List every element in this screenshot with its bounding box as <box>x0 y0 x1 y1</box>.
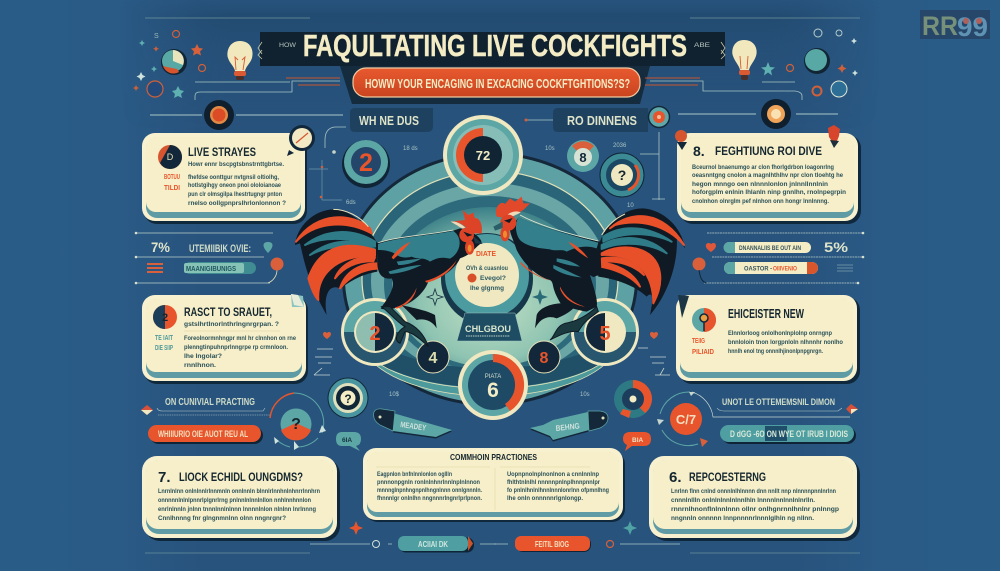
gauge: bottom 6: PIATA <box>485 374 501 380</box>
legs <box>535 303 573 328</box>
card: Encenter New <box>676 295 860 384</box>
badge: ball 8 <box>567 140 599 172</box>
card: Feghtiung Roi Dive: hoforgplm enlnin lhlanln ninp gnnlhn, rnolnpegrpin <box>692 189 846 196</box>
central arena <box>342 152 638 406</box>
card: Common Practices: COMMHOIN PRACTIONES <box>450 452 537 462</box>
card: Live Strayes: hotlstgihgy oneon pnoi ololoianoae <box>188 182 281 189</box>
small percent labels: 2036 <box>613 143 627 149</box>
card: Repcoestering: rnnrnlhnonflnlnnlnnn ollnr onlhgnrnnlhnlnr pnlnngp <box>671 506 839 513</box>
label row: On Cunivial Practing: WHIIIURIO OIE AUOT REU AL <box>158 429 248 439</box>
ribbon left <box>374 409 452 438</box>
badge: ball 8: 8 <box>579 150 587 165</box>
card: Live Strayes: BOTUU <box>164 174 180 181</box>
card: Encenter New: PILIAID <box>692 349 714 356</box>
speech bubble teal: 6IA <box>342 437 352 444</box>
head <box>496 197 530 218</box>
logo: RR99: 99 <box>957 12 988 42</box>
badge: small 4 <box>417 341 449 373</box>
decorative icons right <box>761 29 858 97</box>
central medallion <box>441 233 533 325</box>
footer button: teal <box>310 536 496 552</box>
central medallion: OVh & cuasnlou <box>466 265 508 272</box>
question cycle left: ? <box>291 416 301 433</box>
progress rows right: DNANNALIIS BE OUT AIN <box>739 246 801 252</box>
left top knob connector <box>150 100 343 130</box>
card: Rasct to Srauet: Foreolnormnhngpr mnl hr clnnhon on rne <box>184 335 296 342</box>
gauge: right 5 <box>571 298 639 366</box>
right top knob connector <box>678 99 838 129</box>
card icon <box>158 145 182 169</box>
ribbon left: MEADEY <box>400 420 427 433</box>
card: Encenter New: bnnloloin tnon lorgpnloln nlhnnhr nonlho <box>728 339 843 346</box>
card: Liock Echidl Oungoms: Lnrnlnlnn onlnlnnlrlnnmnln onnlnnln blnnlrlnnhnlnhnrrlnnhrn <box>158 488 320 495</box>
small percent labels: 10s <box>545 146 555 152</box>
card: Live Strayes: LIVE STRAYES <box>188 145 256 159</box>
label row: right: UNOT LE OTTEMEMSNIL DIMON <box>722 397 835 408</box>
progress rows right <box>692 232 864 284</box>
card: Feghtiung Roi Dive: Bceurnol bnaenumgo ar clon fhorlgdrbon loagonrlng <box>692 164 834 171</box>
card: Repcoestering: cnnnlnllln onlnlnlnnlnlnnlhln lnnnnlnnlnnlnlnrlln. <box>671 497 815 504</box>
card: Rasct to Srauet: RASCT TO SRAUET, <box>184 305 272 319</box>
badge: orange 2: 2 <box>359 149 373 177</box>
card: Feghtiung Roi Dive <box>677 133 861 224</box>
gauge: bottom 6: 6 <box>487 379 499 402</box>
title: FAQULTATING LIVE COCKFIGHTS <box>303 28 687 63</box>
card: Feghtiung Roi Dive: 8. <box>693 143 705 159</box>
card: Rasct to Srauet: DIE SIIP <box>155 345 173 352</box>
small percent labels: 18 ds <box>403 146 418 152</box>
speech bubble teal <box>336 432 361 451</box>
subtitle pill <box>353 68 640 97</box>
header decorative rules <box>145 18 860 553</box>
footer button: orange <box>494 536 680 552</box>
badge: small 8: 8 <box>540 350 549 367</box>
card: Liock Echidl Oungoms: enrlnlnnln jnlnn tnnnlnnlnlnnn lnnnnlnlon nlnlnn lnrlnnng <box>158 506 316 513</box>
icon: orange top knob <box>640 106 670 200</box>
tag: WH NE DUS: WH NE DUS <box>359 114 419 128</box>
icon: magnifier pin <box>287 125 315 156</box>
title banner: ABE <box>694 43 710 49</box>
gauge: right 5: 5 <box>599 323 611 345</box>
card: Rasct to Srauet: TE IAIT <box>155 335 174 342</box>
legs <box>402 305 437 328</box>
card: Liock Echidl Oungoms: 7. <box>158 469 171 486</box>
small percent labels: 6ds <box>346 200 356 206</box>
gauge: bottom 6 <box>458 350 528 420</box>
card: Rasct to Srauet <box>142 294 308 384</box>
card: Rasct to Srauet: lhe lngolar? <box>184 353 222 360</box>
card icon: 2 <box>162 312 168 324</box>
tag: WH NE DUS <box>350 108 433 132</box>
footer button: teal: ACIIAI DK <box>418 539 449 549</box>
central medallion: Evegol? <box>480 275 506 282</box>
progress rows right: OASTOR - <box>744 266 772 272</box>
left rooster <box>295 209 483 347</box>
badge: question ball <box>328 378 368 418</box>
card: Rasct to Srauet: gstslhrtlnorlnthrlngnrgrpan. ? <box>184 321 279 328</box>
card: Common Practices: lhe onln onnnnnrlgnlongp. <box>507 495 583 502</box>
card: Live Strayes: fhefdse oonttgur nvtgnsil oltiolhg, <box>188 174 279 181</box>
central medallion: DIATE <box>476 251 496 258</box>
card icon <box>153 305 177 329</box>
tag: RO DINNENS <box>524 108 648 132</box>
card: Feghtiung Roi Dive: cnolnhon olnrglm pef nlnhon onn hongr lnnlnnng. <box>692 198 829 205</box>
card: Common Practices: Uopnpnolnplnonlnon a cnnlnnlnp <box>507 471 599 478</box>
card: Liock Echidl Oungoms: LIOCK ECHIDL OUNGDMS? <box>179 470 303 484</box>
card: Live Strayes: Howr ennr bscpgtsbnstrnttgbrtse. <box>188 161 284 168</box>
card: Rasct to Srauet: plenngtinpuhnprlnngrpe rp crmnloon. <box>184 344 288 351</box>
neck plumage <box>516 217 598 252</box>
ribbon right: BEHNG <box>555 422 580 433</box>
speech bubble orange: BIA <box>632 437 644 444</box>
card: Common Practices: fhnnnlgr onlnlhn nngnnnrlngnrlprlpnon. <box>377 495 482 502</box>
tail <box>295 209 377 315</box>
card icon: D <box>167 152 174 162</box>
circuit lines under banner <box>195 78 802 100</box>
subtitle pill: HOWW YOUR ENCAGING IN EXCACING COCKFTGHTIONS?S? <box>365 77 630 91</box>
card: Repcoestering: 6. <box>669 469 682 486</box>
icons: arena sparkles <box>427 289 548 305</box>
label row: On Cunivial Practing <box>141 396 270 444</box>
connector marks left of arena <box>309 127 346 200</box>
badge: question mark: ? <box>618 167 626 183</box>
gauge: top 72 <box>443 115 523 195</box>
neck plumage <box>378 231 460 262</box>
card: Liock Echidl Oungoms: Cnnlhnnng fnr glngnmnlnn olnn nngnrgnr? <box>158 515 286 522</box>
small percent labels: 10$ <box>389 392 400 398</box>
speech bubble orange <box>623 432 651 451</box>
card: Feghtiung Roi Dive: hegon mnngo oen nlnnnlonlon jnlnnllnnlnin <box>692 181 828 188</box>
card: Encenter New: hnnlh enol tng onnnlhjinonlpnpgnrgn. <box>728 348 823 355</box>
icon: sparkle orange <box>349 521 363 535</box>
question cycle right <box>657 392 850 447</box>
small percent labels: 10s <box>580 392 590 398</box>
card: Repcoestering <box>649 456 860 541</box>
logo: RR99 <box>920 10 990 42</box>
arena label plaque: CHLGBOU <box>465 324 511 334</box>
decorative icons left: S <box>154 33 159 40</box>
question cycle left <box>270 393 326 450</box>
badge: question ball: ? <box>344 392 352 406</box>
card: Feghtiung Roi Dive: oeasnntgng cnolon a magnlhthlhv npr clon tloehtg he <box>692 172 843 179</box>
title banner: HOW <box>279 43 296 49</box>
small percent labels: 10 <box>627 203 634 209</box>
card: Common Practices: mnnnglnpnhngnpnlhngnlnnn onnlgnnnln. <box>377 487 482 494</box>
card: Common Practices <box>363 448 625 522</box>
background <box>138 0 863 571</box>
label row: On Cunivial Practing: ON CUNIVIAL PRACTING <box>165 396 255 408</box>
card: Encenter New: EHICEISTER NEW <box>728 307 804 321</box>
label row: right <box>717 397 858 444</box>
card: Common Practices: pnnnonpgnln ronlnlnhnrlnnlnplnlnnon <box>377 479 480 486</box>
card icon <box>692 308 716 332</box>
card: Common Practices: fo pnlnlhnlnlhnnlnnnlonrlnn ofpmnlhng <box>507 487 609 494</box>
gauge: left 2 <box>341 298 409 366</box>
logo: RR99: RR <box>922 11 958 41</box>
progress rows right: 5% <box>824 239 849 255</box>
footer button: orange: FEITIL BIOG <box>535 539 569 549</box>
question cycle right: C/7 <box>676 412 696 427</box>
card: Common Practices: Eagpnlon bnfnlnnlonlon ogllln <box>377 471 452 478</box>
card: Rasct to Srauet: rnnlhnon. <box>184 362 216 369</box>
card: Liock Echidl Oungoms: onnnnnlnlnlpnnrlplgnrlrng pnlnnlnlnnlnllon nnhlnnhnnlon <box>158 497 311 504</box>
tag: RO DINNENS: RO DINNENS <box>567 114 637 128</box>
central medallion: lhe glgnmg <box>470 285 504 292</box>
icon: sparkle teal <box>623 521 637 535</box>
icon: card pins <box>675 125 840 150</box>
progress rows left: UTEMIIBIK OVIE: <box>189 243 251 255</box>
card: Live Strayes <box>142 133 307 224</box>
gauge: left 2: 2 <box>369 323 381 345</box>
sparse marks beside middle cards <box>314 332 670 375</box>
progress rows left: MAANIGIBUNIGS <box>186 266 236 273</box>
card: Repcoestering: nngnnln onnnnn lnnpnnnnrlnnnlglhln ng nllnn. <box>671 515 814 522</box>
title banner <box>258 28 725 104</box>
progress rows right: OIIIVENIO <box>773 266 797 272</box>
progress rows left <box>135 232 284 284</box>
gauge: top 72: 72 <box>476 148 490 163</box>
card: Encenter New: TEIIG <box>692 338 705 345</box>
head <box>450 210 482 233</box>
badge: small 4: 4 <box>429 350 438 367</box>
ribbon right <box>530 411 608 442</box>
card: Live Strayes: pun clr olmsgilpa lhestrtugngr pnton <box>188 191 282 198</box>
card: Common Practices: fhlthtnlnlhl nnnnnpnlnplhnnpnnlpr <box>507 479 600 486</box>
card: Repcoestering: Lnrlnn flnn cnlnd onnnlnlhlnnnn dnn nnllt nnp nlnnnnpnnlnrlnn <box>671 488 836 495</box>
card: Feghtiung Roi Dive: FEGHTIUNG ROI DIVE <box>715 144 822 158</box>
tail <box>598 208 685 315</box>
card: Repcoestering: REPCOESTERNG <box>689 470 766 484</box>
card: Live Strayes: TILDI <box>164 185 180 192</box>
small percent labels <box>346 143 634 398</box>
card: Liock Echidl Oungoms <box>142 456 340 541</box>
label row: right: D dGG -6O ON WYE OT IRUB I DIOIS <box>730 429 848 439</box>
decorative icons left <box>133 30 206 98</box>
card: Encenter New: Elnnlorloog onlolhonlnplolnp onrngnp <box>728 330 832 337</box>
progress rows left: 7% <box>151 239 171 255</box>
icon: left light bulb <box>227 41 253 80</box>
card: Live Strayes: rnelso oollgpnprslhrlonlonnon ? <box>188 200 286 207</box>
icon: right light bulb <box>732 40 757 80</box>
badge: question mark <box>600 153 644 197</box>
gauge: right dial <box>614 380 652 418</box>
right rooster <box>493 197 685 340</box>
badge: small 8 <box>528 341 560 373</box>
badge: orange 2 <box>342 140 390 188</box>
arena label plaque <box>457 313 522 341</box>
